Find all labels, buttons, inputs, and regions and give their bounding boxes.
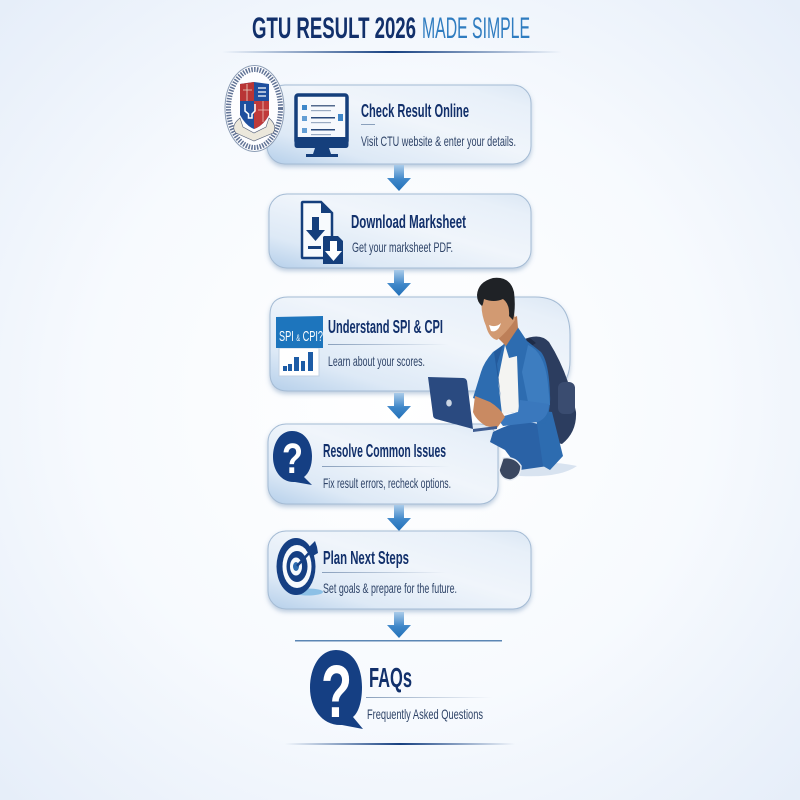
text block: Fix result errors, recheck options. <box>323 475 451 491</box>
neck <box>498 316 518 346</box>
laptop <box>428 377 473 429</box>
smile <box>489 323 501 331</box>
title: GTU RESULT 2026 <box>252 12 416 45</box>
icon: SPI and CPI card: SPI & CPI? <box>279 328 323 345</box>
panel: plan next steps <box>268 531 531 609</box>
panel: check result online <box>267 85 531 164</box>
icon: SPI and CPI card <box>276 316 323 376</box>
heading: Download Marksheet <box>351 211 466 232</box>
heading: Check Result Online <box>361 100 469 121</box>
heading: Resolve Common Issues <box>323 440 446 461</box>
text block: Set goals & prepare for the future. <box>323 580 457 596</box>
shoe <box>499 458 521 480</box>
hair <box>477 278 515 320</box>
heading: FAQs <box>369 662 412 693</box>
panel: FAQs <box>310 650 492 733</box>
heading: Plan Next Steps <box>323 547 409 568</box>
backpack <box>518 336 576 444</box>
panel: understand SPI and CPI <box>270 297 570 391</box>
icon: question bubble: ? <box>282 435 303 483</box>
right sleeve <box>522 345 550 405</box>
legs <box>490 422 549 470</box>
arrow 3 <box>387 393 411 419</box>
arrow 2 <box>387 270 411 296</box>
face <box>482 296 515 340</box>
title: MADE SIMPLE <box>422 12 530 45</box>
text block: Visit CTU website & enter your details. <box>361 133 516 149</box>
icon: question bubble: ? <box>321 650 352 733</box>
arrow 4 <box>387 505 411 531</box>
text block: Frequently Asked Questions <box>367 706 483 722</box>
icon: target <box>276 538 323 596</box>
heading: Understand SPI & CPI <box>328 316 443 337</box>
undershirt <box>498 345 519 414</box>
panel: download marksheet <box>269 194 531 268</box>
shirt tail <box>535 410 563 470</box>
icon: monitor <box>294 95 348 157</box>
text block: Get your marksheet PDF. <box>352 239 453 255</box>
forearm <box>497 400 549 426</box>
icon: download document <box>302 201 343 264</box>
panel: resolve common issues <box>268 424 498 504</box>
shirt body <box>473 326 550 424</box>
icon: university seal <box>225 66 284 152</box>
illustration: student with laptop <box>428 278 577 480</box>
arrow 5 <box>387 612 411 638</box>
icon: question bubble <box>273 431 312 485</box>
arrow 1 <box>387 165 411 191</box>
text block: Learn about your scores. <box>328 353 425 369</box>
